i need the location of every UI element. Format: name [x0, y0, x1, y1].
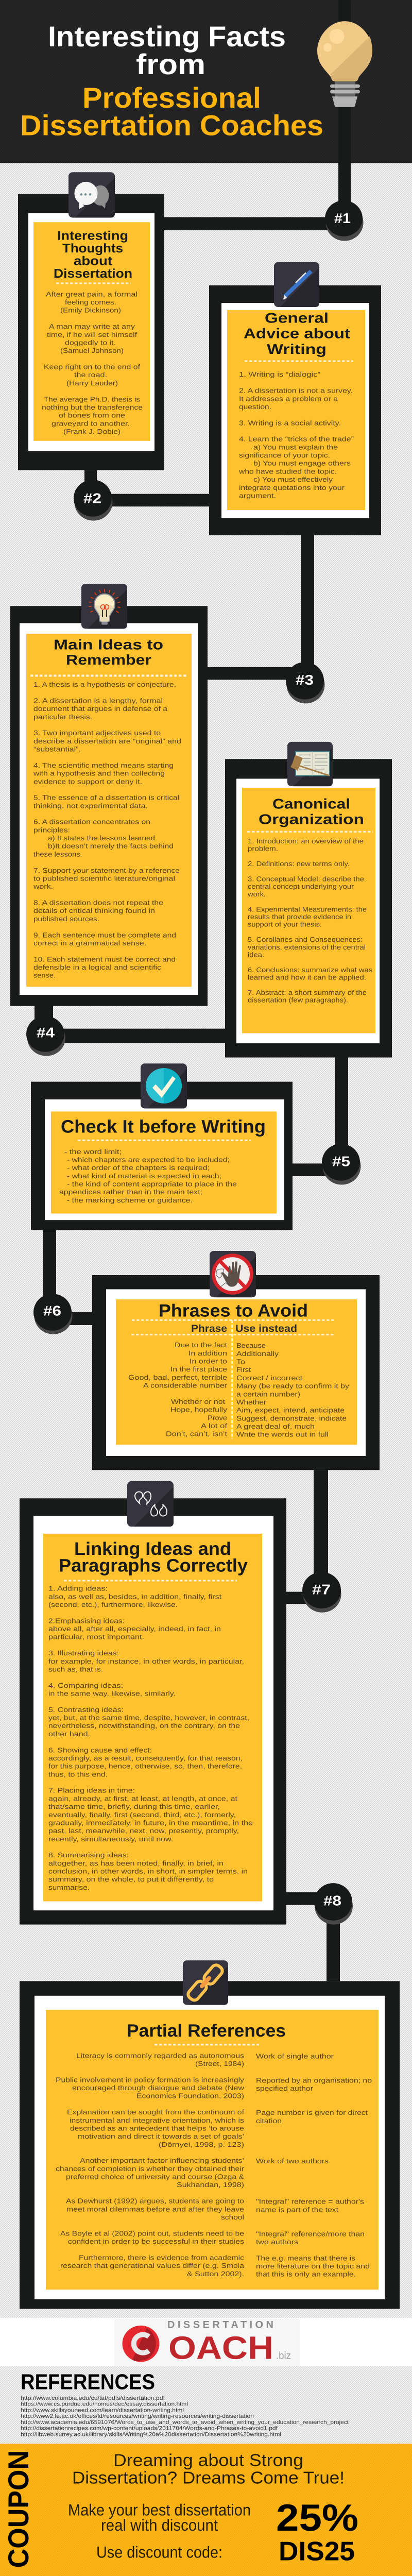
connector: vertical line from bulb to #1 — [338, 0, 351, 212]
heading: general advice: General — [265, 310, 329, 326]
icon: light bulb — [317, 21, 372, 107]
text block: linking list: above all, after all, especially, indeed, in fact, in — [48, 1625, 221, 1633]
text block: canonical list: 1. Introduction: an overview of the — [248, 837, 364, 845]
text block: advice list: who have studied the topic. — [238, 468, 337, 475]
heading: linking ideas: Paragraphs Correctly — [59, 1555, 248, 1575]
connector: #5 links — [293, 1058, 348, 1176]
table column: use instead: First — [236, 1366, 251, 1374]
heading: partial references: Partial References — [127, 2021, 286, 2041]
heading: interesting thoughts: Thoughts — [62, 242, 123, 256]
coupon headline: Dreaming about Strong — [113, 2451, 303, 2470]
text block: advice list: b) You must engage others — [253, 460, 351, 467]
text block: checklist — [59, 1148, 237, 1204]
text block: linking list: also, as well as, besides, in addition, finally, first — [48, 1593, 221, 1600]
text block: canonical list: central concept underlying your — [248, 883, 354, 890]
text block: examples: Another important factor influencing students’ — [80, 2157, 244, 2164]
heading: linking ideas: Linking Ideas and — [74, 1538, 231, 1559]
text block: linking list: other hand. — [48, 1730, 90, 1738]
icon: idea bulb — [81, 584, 127, 629]
table column: use instead: A great deal of, much — [236, 1422, 315, 1430]
text block: notes: The e.g. means that there is — [256, 2255, 355, 2262]
text block: reference urls: http://dissertationrecipes.com/wp-content/uploads/2011704/Words-and-Phrases-to-avoid1.pdf — [21, 2426, 278, 2432]
text block: reference urls: http://www2.le.ac.uk/offices/ld/resources/writing/writing-resources/writing-dissertation — [21, 2413, 254, 2419]
coupon: COUPON — [2, 2450, 35, 2568]
coupon headline: Use discount code: — [96, 2543, 222, 2562]
heading: general advice: Advice about — [244, 326, 350, 342]
connector: #1 to panel 1 — [164, 217, 334, 230]
text block: canonical list: dissertation (few paragraphs). — [248, 996, 348, 1004]
logo: dissertation coach: OACH — [168, 2330, 273, 2366]
heading: linking ideas — [59, 1538, 248, 1575]
text block: notes — [256, 2053, 372, 2278]
text block: notes: Reported by an organisation; no — [256, 2077, 372, 2084]
text block: linking list: for example, for instance, in other words, in particular, — [48, 1657, 244, 1665]
table column: use instead: Whether — [236, 1398, 267, 1406]
text block: linking list: conclusion, in other words, in short, in simpler terms, in — [48, 1868, 248, 1875]
text block: examples: research that generational values differ (e.g. Smola — [60, 2262, 245, 2269]
table column: use instead: Write the words out in full — [236, 1431, 329, 1438]
text block: main ideas list: 5. The essence of a dissertation is critical — [33, 794, 179, 802]
connector: #7 links — [286, 1470, 328, 1604]
text block: canonical list: 3. Conceptual Model: describe the — [248, 875, 364, 883]
logo: dissertation coach — [0, 2318, 412, 2366]
title — [20, 21, 323, 142]
text block: examples: motivation and direct it towards a set of goals’ — [78, 2132, 244, 2140]
text block: examples: As Boyle et al (2002) point out, students need to be — [60, 2230, 244, 2237]
panel: linking ideas — [20, 1481, 286, 1925]
table column: phrases: A considerable number — [143, 1382, 228, 1389]
text block: main ideas list: evidence to support or deny it. — [33, 778, 142, 785]
text block: canonical list: 5. Corollaries and Consequences: — [248, 936, 363, 943]
coupon — [0, 2444, 412, 2576]
text block: examples: Literacy is commonly regarded as autonomous — [76, 2052, 244, 2059]
panel: check it before writing — [31, 1063, 293, 1230]
table column: use instead: To — [236, 1358, 245, 1365]
header band — [0, 0, 412, 163]
text block: reference urls: https://www.cs.purdue.edu/homes/dec/essay.dissertation.html — [21, 2401, 188, 2408]
table header: Use instead — [235, 1323, 297, 1334]
text block: main ideas list: thinking, not experimental data. — [33, 802, 148, 809]
table column: use instead: Additionally — [236, 1350, 279, 1358]
text block: examples: chances of completion is whether they obtained their — [56, 2165, 245, 2173]
text block: notes: Page number is given for direct — [256, 2109, 368, 2116]
text block: main ideas list: 4. The scientific method means starting — [33, 761, 174, 769]
text block: checklist: - what kind of material is expected in each; — [67, 1172, 221, 1180]
text block: reference urls: http://www.skillsyouneed.com/learn/dissertation-writing.html — [21, 2408, 184, 2413]
text block: main ideas list: 7. Support your statement by a reference — [33, 867, 180, 874]
marker #6 — [33, 1294, 72, 1334]
text block: examples: confident in order to be successful in their studies — [68, 2238, 244, 2245]
connector: #2 links — [84, 470, 209, 506]
coupon headline: Make your best dissertation — [68, 2501, 251, 2519]
marker #3 — [286, 662, 324, 703]
text block: examples: Public involvement in policy formation is increasingly — [56, 2076, 244, 2083]
text block: notes: Work of single author — [256, 2053, 334, 2060]
table column: phrases: A lot of — [201, 1422, 227, 1430]
text block: linking list: particular, most important. — [48, 1633, 144, 1641]
text block: main ideas list: principles: — [33, 826, 70, 834]
connector: #8 links — [286, 1891, 340, 1981]
table column: use instead: Because — [236, 1342, 266, 1349]
text block: linking list: 7. Placing ideas in time: — [48, 1787, 135, 1794]
table column: phrases — [128, 1341, 228, 1438]
text block: main ideas list: 3. Two important adjectives used to — [33, 729, 161, 737]
marker #6: #6 — [43, 1303, 61, 1318]
text block: examples: & Sutton 2002). — [187, 2270, 244, 2278]
text block: main ideas list: to published scientific literature/original — [33, 875, 175, 882]
marker #3: #3 — [296, 672, 314, 688]
text block: quotes: (Harry Lauder) — [66, 379, 118, 387]
text block: checklist: - the kind of content appropriate to place in the — [67, 1180, 237, 1188]
text block: advice list: integrate quotations into your — [239, 484, 345, 492]
text block: notes: "Integral" reference/more than — [256, 2230, 365, 2238]
text block: canonical list: results that provide evidence in — [248, 913, 351, 921]
text block: linking list: altogether, as has been noted, finally, in brief, in — [48, 1859, 224, 1867]
text block: main ideas list: published sources. — [33, 915, 99, 923]
marker #2 — [74, 480, 112, 521]
table column: use instead: Suggest, demonstrate, indicate — [236, 1415, 347, 1422]
panel: canonical organization — [225, 742, 392, 1058]
marker #8 — [314, 1883, 353, 1925]
heading: check it before writing: Check It before Writing — [61, 1116, 266, 1137]
table column: use instead — [236, 1342, 349, 1438]
title: from — [136, 48, 205, 81]
text block: main ideas list: 10. Each statement must be correct and — [33, 956, 176, 963]
marker #7: #7 — [312, 1582, 331, 1597]
table column: phrases: Whether or not — [171, 1398, 225, 1405]
text block: main ideas list: “substantial”. — [33, 745, 81, 753]
text block: notes: that this is only an example. — [256, 2270, 356, 2278]
panel: interesting thoughts — [18, 172, 164, 470]
text block: canonical list: work. — [247, 890, 266, 898]
text block: checklist: - the word limit; — [64, 1148, 122, 1156]
text block: advice list: a) You must explain the — [253, 444, 338, 451]
text block: main ideas list: b)It doesn’t merely the facts behind — [48, 842, 174, 850]
text block: examples: school — [221, 2213, 244, 2221]
text block: linking list: 2.Emphasising ideas: — [48, 1617, 125, 1624]
text block: canonical list: learned and how it can be applied. — [248, 974, 366, 981]
heading: interesting thoughts: Interesting — [57, 229, 128, 243]
coupon headline: Dissertation? Dreams Come True! — [72, 2468, 345, 2487]
marker #1 — [325, 200, 364, 241]
icon: chain link — [183, 1960, 228, 2005]
discount code: DIS25 — [279, 2537, 355, 2566]
heading: main ideas: Remember — [66, 652, 151, 668]
heading: interesting thoughts: Dissertation — [54, 267, 132, 281]
text block: main ideas list: defensible in a logical and scientific — [33, 963, 161, 971]
table column: phrases: In addition — [188, 1349, 227, 1357]
connector: #4 links — [35, 1006, 225, 1043]
text block: main ideas list: work. — [33, 883, 53, 890]
text block: linking list: eventually, finally, first (second, third, etc.), formerly, — [48, 1811, 236, 1819]
logo: dissertation coach: DISSERTATION — [167, 2319, 273, 2331]
text block: canonical list: variations, extensions of the central — [248, 943, 366, 951]
text block: main ideas list: 1. A thesis is a hypothesis or conjecture. — [33, 681, 176, 688]
text block: linking list: accordingly, as a result, consequently, for that reason, — [48, 1754, 243, 1762]
panel: main ideas — [10, 584, 208, 1006]
text block: linking list: 5. Contrasting ideas: — [48, 1706, 124, 1714]
text block: canonical list — [247, 837, 372, 1004]
text block: quotes: feeling comes. — [65, 298, 116, 306]
text block: checklist: - the marking scheme or guidance. — [67, 1196, 193, 1204]
text block: main ideas list: describe a dissertation are “original” and — [33, 737, 181, 745]
text block: linking list: thus, to this end. — [48, 1771, 108, 1778]
text block: advice list — [238, 370, 354, 499]
table column: phrases: Hope, hopefully — [170, 1406, 227, 1414]
text block: canonical list: 6. Conclusions: summarize what was — [248, 966, 372, 974]
heading: interesting thoughts — [54, 229, 132, 281]
table header — [191, 1323, 297, 1334]
text block: main ideas list: correct in a grammatical sense. — [33, 939, 146, 947]
panel: partial references — [20, 1960, 400, 2309]
marker #1: #1 — [334, 211, 351, 226]
marker #7 — [302, 1572, 341, 1613]
text block: examples: Economics Foundation, 2003) — [136, 2092, 244, 2100]
coupon headline — [68, 2451, 345, 2562]
title: Dissertation Coaches — [20, 110, 323, 142]
table column: use instead: Many (be ready to confirm it by — [236, 1382, 349, 1390]
marker #5 — [322, 1144, 360, 1185]
text block: main ideas list: particular thesis. — [33, 713, 92, 721]
text block: linking list: recently, simultaneously, until now. — [48, 1835, 173, 1843]
text block: examples: preferred choice of university and course (Ozga & — [66, 2173, 244, 2181]
text block: quotes: The average Ph.D. thesis is — [44, 395, 140, 403]
table column: use instead: Aim, expect, intend, anticipate — [236, 1406, 345, 1414]
text block: quotes: A man may write at any — [49, 323, 135, 330]
heading: main ideas — [54, 637, 163, 668]
text block: linking list: for this purpose, hence, otherwise, so, then, therefore, — [48, 1762, 242, 1770]
table column: phrases: Good, bad, perfect, terrible — [128, 1374, 227, 1381]
text block: advice list: 4. Learn the “tricks of the trade” — [239, 435, 354, 443]
text block: linking list: nevertheless, notwithstanding, on the contrary, on the — [48, 1722, 240, 1730]
marker #4: #4 — [37, 1025, 55, 1040]
text block: advice list: It addresses a problem or a — [239, 395, 338, 402]
text block: main ideas list: 9. Each sentence must be complete and — [33, 931, 176, 939]
panel: general advice — [209, 262, 381, 535]
text block: linking list: summary, on the whole, to put it differently, to — [48, 1875, 214, 1883]
text block: quotes: time, if he will set himself — [47, 331, 137, 338]
marker #2: #2 — [83, 490, 101, 506]
title: Professional — [82, 82, 261, 114]
text block: canonical list: 7. Abstract: a short summary of the — [248, 989, 367, 996]
text block: examples: Explanation can be sought from the continuum of — [67, 2108, 244, 2116]
icon: book and gavel — [287, 742, 333, 786]
text block: examples — [56, 2052, 245, 2278]
icon: chat bubbles — [68, 172, 115, 217]
text block: notes: Work of two authors — [256, 2157, 329, 2165]
marker #5: #5 — [332, 1154, 350, 1169]
text block: main ideas list — [33, 681, 181, 979]
text block: advice list: 1. Writing is “dialogic” — [239, 370, 320, 378]
text block: main ideas list: details of critical thinking found in — [33, 907, 155, 914]
text block: quotes: (Samuel Johnson) — [60, 347, 124, 354]
text block: linking list: past, last, meanwhile, next, now, presently, promptly, — [48, 1827, 239, 1835]
icon: stop hand — [210, 1251, 256, 1297]
text block: linking list: yet, but, at the same time, despite, however, in contrast, — [48, 1714, 249, 1722]
heading: canonical organization: Organization — [259, 811, 364, 827]
table column: phrases: In the first place — [170, 1365, 227, 1373]
text block: quotes: (Emily Dickinson) — [60, 307, 121, 314]
table column: phrases: Due to the fact — [175, 1341, 227, 1349]
text block: linking list: gradually, immediately, in future, in the meantime, in the — [48, 1819, 253, 1826]
text block: linking list: summarise. — [48, 1884, 90, 1891]
text block: quotes: Keep right on to the end of — [44, 363, 140, 370]
table column: phrases: In order to — [190, 1358, 227, 1365]
text block: checklist: appendices rather than in the main text; — [59, 1188, 202, 1196]
text block: canonical list: problem. — [248, 845, 278, 853]
text block: canonical list: support of your thesis. — [248, 921, 322, 928]
text block: reference urls — [21, 2395, 349, 2437]
text block: examples: described as an antecedent that helps ‘to arouse — [70, 2125, 244, 2132]
text block: advice list: significance of your topic. — [239, 451, 330, 459]
text block: notes: name is part of the text — [256, 2206, 338, 2213]
text block: reference urls: http://www.columbia.edu/cu/tat/pdfs/dissertation.pdf — [21, 2395, 165, 2401]
text block: examples: instrumental and integrative orientation, which is — [70, 2116, 244, 2124]
icon: check mark — [141, 1063, 187, 1109]
table column: phrases: Prove — [208, 1414, 227, 1421]
table header: Phrase — [191, 1323, 227, 1334]
title: Interesting Facts — [48, 21, 286, 53]
text block: notes: two authors — [256, 2238, 298, 2246]
text block: quotes: of bones from one — [59, 412, 125, 419]
text block: examples: encouraged through dialogue and debate (New — [72, 2084, 244, 2092]
icon: quotation marks — [127, 1481, 174, 1527]
heading: general advice — [244, 310, 350, 357]
text block: checklist: - what order of the chapters is required; — [67, 1164, 210, 1172]
text block: linking list — [48, 1585, 253, 1891]
text block: main ideas list: sense. — [33, 972, 56, 979]
text block: linking list: 3. Illustrating ideas: — [48, 1649, 119, 1657]
text block: notes: more literature on the topic and — [256, 2262, 370, 2270]
connector: #3 links — [208, 535, 314, 680]
heading: main ideas: Main Ideas to — [54, 637, 163, 652]
text block: reference urls: http://www.academia.edu/6591076/Words_to_use_and_words_to_avoid_when_writing_your_education_research_project — [21, 2419, 349, 2426]
text block: main ideas list: document that argues in defense of a — [33, 705, 168, 713]
panel: phrases to avoid — [92, 1251, 380, 1470]
text block: examples: Furthermore, there is evidence from academic — [79, 2254, 244, 2261]
text block: linking list: (second, etc.), furthermore, likewise. — [48, 1601, 178, 1608]
heading: phrases to avoid: Phrases to Avoid — [159, 1301, 308, 1320]
marker #4 — [26, 1016, 65, 1056]
text block: reference urls: http://libweb.surrey.ac.uk/library/skills/Writing%20a%20dissertation/Dissertation%20writing.html — [21, 2432, 281, 2437]
text block: notes: "Integral" reference = author's — [256, 2198, 364, 2206]
text block: examples: meet moral dilemmas before and after they leave — [66, 2206, 244, 2213]
coupon headline: real with discount — [101, 2516, 218, 2534]
text block: advice list: argument. — [239, 492, 276, 499]
heading: interesting thoughts: about — [74, 254, 113, 268]
text block: examples: Sukhandan, 1998) — [177, 2181, 244, 2189]
logo: dissertation coach: .biz — [276, 2350, 291, 2361]
text block: notes: citation — [256, 2117, 282, 2125]
table column: use instead: a certain number) — [236, 1390, 300, 1398]
table column: use instead: Correct / incorrect — [236, 1374, 302, 1382]
text block: linking list: again, already, at first, at least, at length, at once, at — [48, 1795, 237, 1802]
text block: main ideas list: 2. A dissertation is a lengthy, formal — [33, 697, 163, 704]
text block: canonical list: idea. — [248, 951, 264, 958]
discount amount: 25% — [276, 2496, 358, 2538]
text block: quotes: graveyard to another. — [52, 420, 130, 427]
heading: references: REFERENCES — [21, 2370, 155, 2394]
text block: linking list: 6. Showing cause and effect: — [48, 1747, 152, 1754]
text block: advice list: 3. Writing is a social activity. — [239, 419, 341, 427]
text block: linking list: 8. Summarising ideas: — [48, 1851, 129, 1859]
text block: main ideas list: a) It states the lessons learned — [48, 834, 155, 842]
text block: advice list: 2. A dissertation is not a survey. — [239, 387, 353, 395]
connector: #6 links — [43, 1230, 92, 1325]
icon: pen — [274, 262, 319, 307]
text block: main ideas list: 6. A dissertation concentrates on — [33, 818, 150, 826]
text block: canonical list: 4. Experimental Measurements: the — [248, 905, 367, 913]
text block: examples: (Street, 1984) — [195, 2060, 244, 2067]
text block: advice list: c) You must effectively — [253, 476, 333, 483]
text block: advice list: question. — [239, 403, 271, 411]
text block: examples: (Dörnyei, 1998, p. 123) — [159, 2141, 244, 2148]
text block: linking list: in the same way, likewise, similarly. — [48, 1690, 176, 1697]
text block: main ideas list: 8. A dissertation does not repeat the — [33, 899, 163, 906]
text block: checklist: - which chapters are expected to be included; — [67, 1156, 230, 1163]
text block: linking list: 1. Adding ideas: — [48, 1585, 108, 1592]
heading: canonical organization: Canonical — [272, 796, 350, 811]
text block: linking list: that/same time, briefly, during this time, earlier, — [48, 1803, 220, 1810]
marker #8: #8 — [323, 1893, 341, 1908]
text block: quotes — [42, 291, 143, 435]
text block: quotes: doggedly to it. — [65, 339, 116, 346]
text block: quotes: the road. — [74, 371, 107, 379]
table column: phrases: Don’t, can’t, isn’t — [166, 1430, 227, 1438]
text block: quotes: (Frank J. Dobie) — [63, 428, 121, 435]
text block: main ideas list: these lessons. — [33, 851, 82, 858]
text block: canonical list: 2. Definitions: new terms only. — [248, 860, 350, 868]
text block: linking list: 4. Comparing ideas: — [48, 1682, 123, 1689]
text block: quotes: After great pain, a formal — [46, 291, 138, 298]
text block: linking list: such as, that is. — [48, 1666, 103, 1673]
heading: general advice: Writing — [267, 342, 327, 357]
text block: notes: specified author — [256, 2084, 314, 2092]
heading: canonical organization — [259, 796, 364, 827]
text block: main ideas list: with a hypothesis and then collecting — [33, 770, 165, 777]
text block: examples: As Dewhurst (1992) argues, students are going to — [66, 2197, 244, 2205]
text block: quotes: nothing but the transference — [42, 403, 143, 411]
